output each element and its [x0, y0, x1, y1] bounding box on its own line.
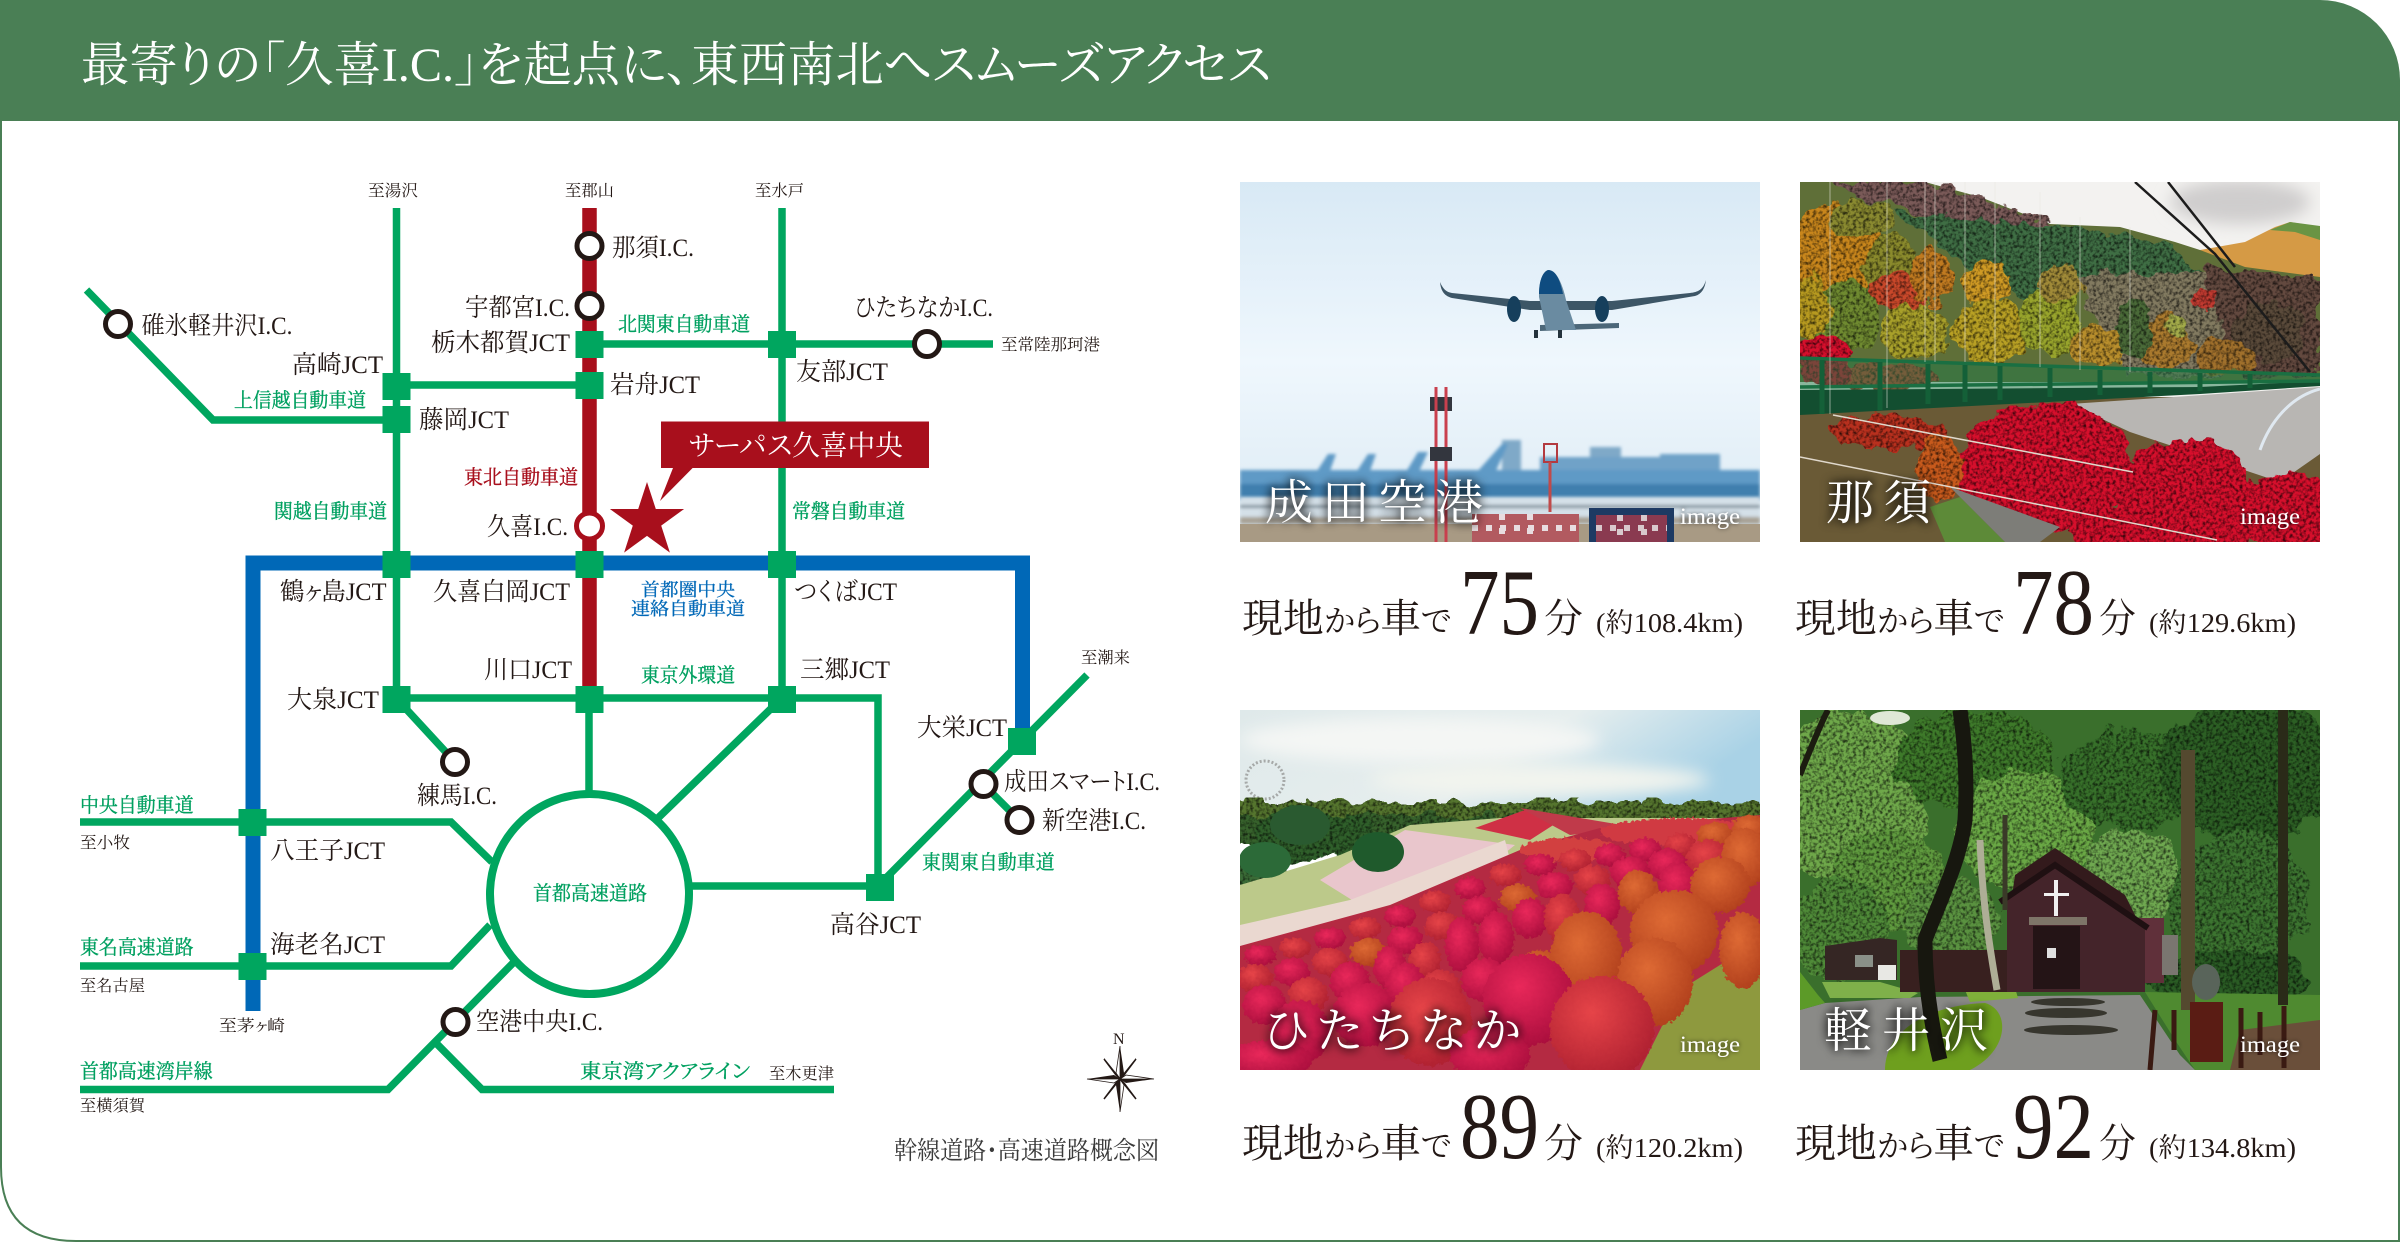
direction labels: 至湯沢 — [368, 182, 418, 200]
direction labels: 至茅ヶ崎 — [219, 1016, 285, 1035]
direction labels: 至横須賀 — [80, 1097, 146, 1115]
direction labels: 至小牧 — [80, 834, 130, 852]
tree line — [1230, 802, 1770, 888]
ferris wheel — [1246, 761, 1284, 799]
callout: property name — [660, 422, 929, 501]
direction labels: 至潮来 — [1081, 649, 1130, 667]
interchange and junction names: 栃木都賀JCT — [431, 329, 570, 357]
expressway names: 関越自動車道 — [274, 500, 387, 523]
travel time: Nasu — [1795, 551, 2296, 655]
place name: 軽井沢 — [1824, 1005, 1988, 1058]
travel time: Hitachinaka: 現地から車で — [1242, 1121, 1451, 1166]
direction labels: 至名古屋 — [80, 977, 145, 995]
photo panel: Hitachinaka — [1228, 710, 1770, 1083]
airplane — [1440, 270, 1706, 338]
image note: image — [2240, 1032, 2300, 1057]
interchange and junction names: 友部JCT — [796, 358, 888, 386]
place name: 那須 — [1826, 477, 1931, 530]
interchange and junction names: 岩舟JCT — [610, 371, 700, 399]
kochia bushes — [1228, 815, 1769, 1083]
interchange and junction names: 成田スマートI.C. — [1004, 768, 1160, 796]
interchange and junction names: 大栄JCT — [917, 714, 1007, 742]
green expressway lines — [80, 208, 1087, 1090]
interchange and junction names: 八王子JCT — [270, 838, 385, 865]
cosmos hill — [1240, 818, 1722, 925]
header band — [0, 0, 2400, 121]
hillside — [1800, 182, 2320, 382]
church — [1900, 848, 2178, 992]
expressway names: 東京湾アクアライン — [580, 1060, 751, 1083]
moss mound — [1885, 1003, 2002, 1070]
expressway names: 首都高速湾岸線 — [80, 1060, 212, 1083]
small trees — [1352, 832, 1404, 872]
suspension bridge — [1800, 357, 2320, 415]
interchange and junction names: 海老名JCT — [270, 931, 385, 959]
travel time: Nasu: 現地から車で — [1795, 596, 2004, 641]
runway — [1240, 497, 1760, 527]
travel time: Narita — [1242, 551, 1743, 655]
expressway names — [80, 313, 1054, 1083]
interchange and junction names: 練馬I.C. — [417, 782, 497, 810]
river — [2070, 387, 2320, 482]
expressway names: 常磐自動車道 — [792, 500, 905, 523]
metropolitan expressway ring — [490, 794, 689, 994]
direction labels: 至郡山 — [565, 182, 614, 200]
expressway names: 東名高速道路 — [80, 936, 194, 959]
map caption: 幹線道路・高速道路概念図 — [894, 1137, 1159, 1165]
image note: image — [2240, 504, 2300, 529]
interchange and junction names: ひたちなかI.C. — [855, 295, 993, 322]
lower bank — [1800, 397, 2320, 542]
tree trunks — [1800, 710, 2284, 1070]
travel time: Hitachinaka — [1242, 1075, 1743, 1179]
interchange and junction names: 大泉JCT — [287, 686, 379, 714]
travel time: Narita: 75 — [1460, 551, 1539, 655]
expressway names: 首都高速道路 — [533, 882, 647, 905]
expressway names: 北関東自動車道 — [618, 313, 750, 336]
distant peak — [2200, 222, 2320, 277]
expressway names: 中央自動車道 — [80, 794, 194, 817]
direction labels: 至木更津 — [769, 1065, 834, 1083]
icon: north compass: N — [1113, 1031, 1125, 1048]
interchange and junction names: つくばJCT — [794, 578, 897, 606]
direction labels — [80, 182, 1130, 1115]
bridge cables and hangers — [1800, 182, 2310, 540]
blue ken-o expressway — [253, 563, 1022, 1011]
travel time: Karuizawa: 分 — [2099, 1121, 2136, 1166]
interchange and junction names: 高崎JCT — [292, 351, 383, 379]
expressway names: 連絡自動車道 — [631, 599, 745, 619]
place name: 成田空港 — [1265, 477, 1483, 530]
expressway names: 首都圏中央 — [641, 580, 735, 600]
interchange and junction names: 宇都宮I.C. — [465, 294, 570, 322]
kochia field — [1240, 815, 1760, 1070]
travel time: Karuizawa: (約134.8km) — [2149, 1133, 2296, 1163]
photo panel: Karuizawa — [1800, 710, 2320, 1070]
radio towers — [1430, 387, 1557, 542]
travel time: Narita: (約108.4km) — [1596, 608, 1743, 638]
interchange and junction names: 空港中央I.C. — [476, 1008, 603, 1036]
red tohoku expressway — [582, 208, 597, 695]
interchange and junction names — [142, 234, 1160, 1036]
title: 最寄りの「久喜I.C.」を起点に、東西南北へスムーズアクセス — [81, 39, 1271, 92]
interchange and junction names: 碓氷軽井沢I.C. — [142, 312, 292, 340]
moss patches — [1822, 982, 2018, 1002]
photo panel: Nasu — [1800, 182, 2320, 542]
interchange and junction names: 久喜白岡JCT — [433, 578, 570, 606]
expressway names: 東京外環道 — [641, 664, 735, 687]
sky gap — [1870, 711, 1910, 725]
travel time: Hitachinaka: 分 — [1544, 1121, 1583, 1166]
gravel ground — [1800, 995, 2195, 1070]
interchange and junction names: 久喜I.C. — [487, 513, 568, 541]
junction squares — [238, 331, 1036, 980]
travel time: Narita: 現地から車で — [1242, 596, 1451, 641]
travel time: Karuizawa — [1795, 1075, 2296, 1179]
interchange and junction names: 三郷JCT — [800, 656, 890, 684]
place name: ひたちなか — [1265, 1005, 1520, 1058]
expressway names: 上信越自動車道 — [234, 389, 366, 412]
foliage around deck — [1800, 334, 2320, 542]
direction labels: 至常陸那珂港 — [1001, 336, 1100, 354]
travel time: Narita: 分 — [1544, 596, 1583, 641]
interchange circles — [106, 234, 1032, 1034]
forest canopy — [1800, 710, 2320, 994]
interchange and junction names: 高谷JCT — [830, 911, 921, 939]
star: site location — [610, 482, 684, 553]
ground — [1240, 524, 1760, 542]
icon: north compass — [1087, 1031, 1154, 1112]
expressway names: 東北自動車道 — [464, 466, 578, 489]
photo panel: Narita Airport — [1240, 182, 1760, 542]
interchange and junction names: 鶴ヶ島JCT — [280, 578, 386, 606]
direction labels: 至水戸 — [755, 182, 804, 200]
travel time: Karuizawa: 92 — [2013, 1075, 2094, 1179]
bust on pedestal — [2190, 964, 2223, 1062]
travel time: Nasu: (約129.6km) — [2149, 608, 2296, 638]
image note: image — [1680, 1032, 1740, 1057]
interchange and junction names: 新空港I.C. — [1042, 807, 1146, 835]
travel time: Hitachinaka: 89 — [1460, 1075, 1539, 1179]
callout: property name: サーパス久喜中央 — [689, 430, 903, 462]
side building — [1825, 938, 1897, 980]
travel time: Karuizawa: 現地から車で — [1795, 1121, 2004, 1166]
checker signs — [1472, 508, 1674, 542]
road map — [80, 182, 1160, 1165]
travel time: Nasu: 78 — [2013, 551, 2094, 655]
expressway names: 東関東自動車道 — [922, 851, 1054, 874]
airport skyline — [1240, 440, 1760, 500]
stone steps — [2024, 998, 2118, 1035]
travel time: Nasu: 分 — [2099, 596, 2136, 641]
image note: image — [1680, 504, 1740, 529]
interchange and junction names: 藤岡JCT — [419, 406, 509, 434]
interchange and junction names: 川口JCT — [484, 657, 572, 684]
kuki interchange — [576, 513, 602, 539]
interchange and junction names: 那須I.C. — [612, 234, 694, 262]
travel time: Hitachinaka: (約120.2km) — [1596, 1133, 1743, 1163]
